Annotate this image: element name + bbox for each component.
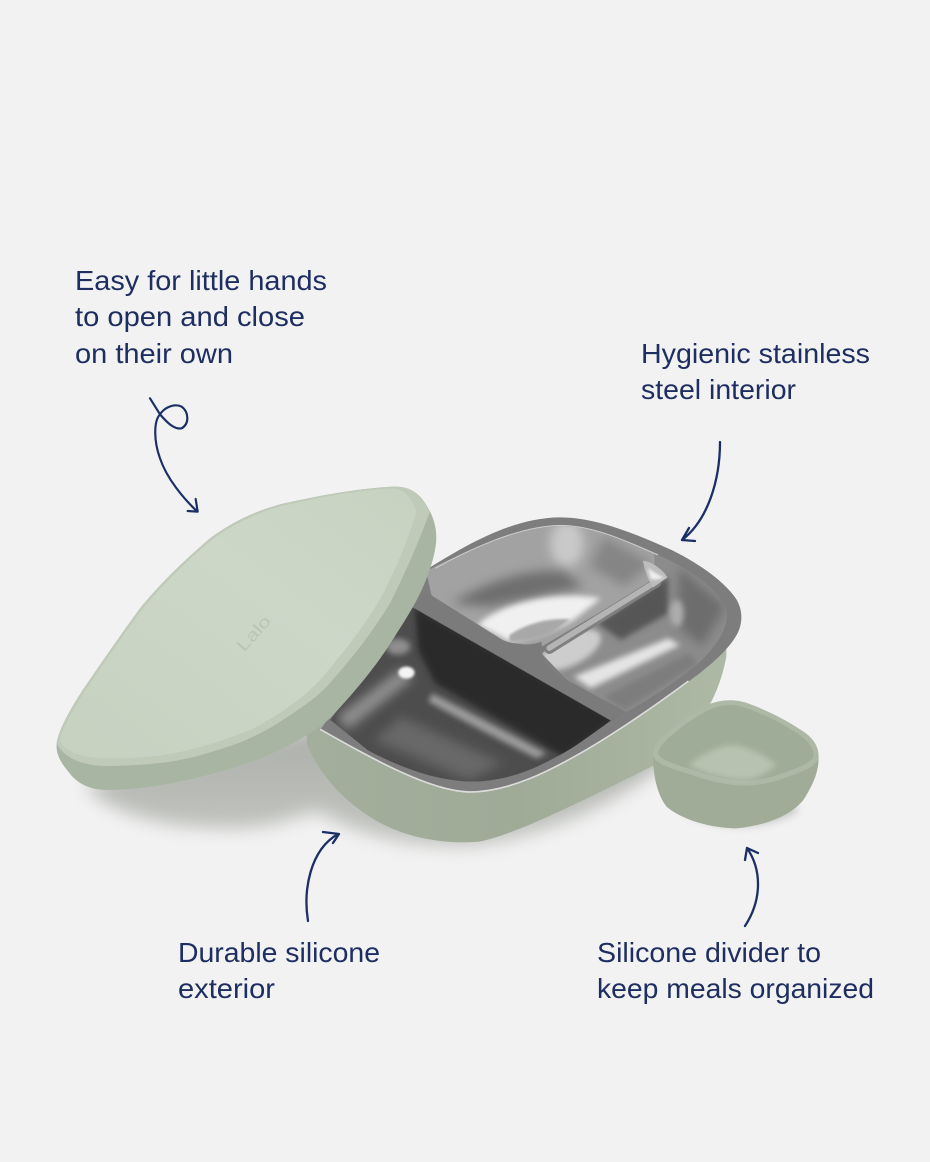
left compartment [330,607,614,782]
callout: stainless steel [641,338,870,405]
callout: silicone exterior: exterior [178,973,275,1004]
callout: silicone divider [597,937,874,1004]
lunch box [307,517,746,842]
bowl rim [653,700,819,786]
top compartment [428,526,654,646]
bowl inner [658,705,814,781]
inner edge highlight [435,525,658,568]
callout: stainless steel: steel interior [641,374,796,405]
bowl [653,700,819,828]
steel interior [330,526,726,782]
bowl floor [689,745,776,780]
callout: stainless steel: Hygienic stainless [641,338,870,369]
arrow: silicone divider [745,848,758,926]
bowl outer wall [653,733,819,828]
callout: little hands [75,265,327,369]
arrow: little hands [150,398,198,512]
shadow under lid and box [85,700,800,846]
arrow: stainless steel [682,442,720,541]
lid face [60,489,417,758]
main divider [411,594,626,721]
lid logo: Lalo [233,612,275,655]
lid top lip [57,487,430,766]
rim highlight [320,681,689,792]
steel rim [320,517,741,793]
callout: silicone exterior: Durable silicone [178,937,380,968]
callout: little hands: Easy for little hands [75,265,327,296]
callout: little hands: on their own [75,338,233,369]
arrow: silicone exterior [307,832,339,921]
thin divider [549,561,668,649]
callout: silicone divider: keep meals organized [597,973,874,1004]
callout: little hands: to open and close [75,301,305,332]
lid side [57,487,436,790]
right compartment [542,554,726,712]
lid [57,487,436,790]
callout: silicone exterior [178,937,380,1004]
callout: silicone divider: Silicone divider to [597,937,821,968]
silicone exterior body [307,627,726,842]
